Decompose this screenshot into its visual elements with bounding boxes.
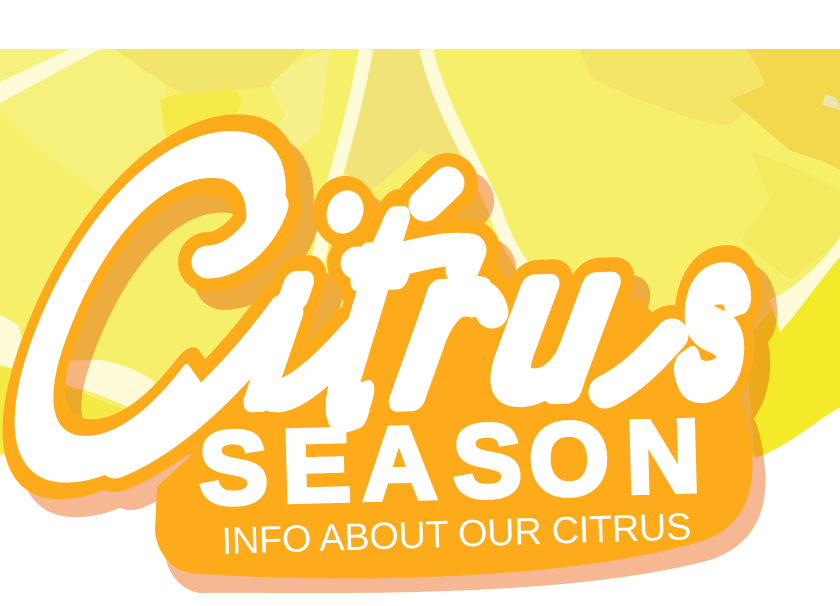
- title shadow: s: [695, 218, 766, 451]
- title: Citrus: r: [389, 214, 496, 442]
- title shadow: t: [326, 162, 445, 498]
- subtitle: INFO ABOUT OUR CITRUS: [221, 506, 692, 563]
- title: Citrus: u: [482, 210, 627, 437]
- title: Citrus: u: [482, 210, 627, 437]
- title: Citrus: s: [679, 200, 750, 433]
- title shadow: r: [405, 232, 512, 460]
- title: Citrus: i: [246, 256, 309, 432]
- title shadow: i: [262, 274, 325, 450]
- heading: SEASON: SEASON: [198, 398, 702, 526]
- title: Citrus: r: [389, 214, 496, 442]
- title shadow: u: [498, 228, 643, 455]
- rind lines: [0, 49, 100, 103]
- title: Citrus: s: [679, 200, 750, 433]
- title: Citrus: t: [310, 144, 429, 480]
- title: Citrus: t: [310, 144, 429, 480]
- badge: [155, 280, 752, 578]
- title: Citrus: i: [246, 256, 309, 432]
- background: lemon slice: [0, 0, 840, 460]
